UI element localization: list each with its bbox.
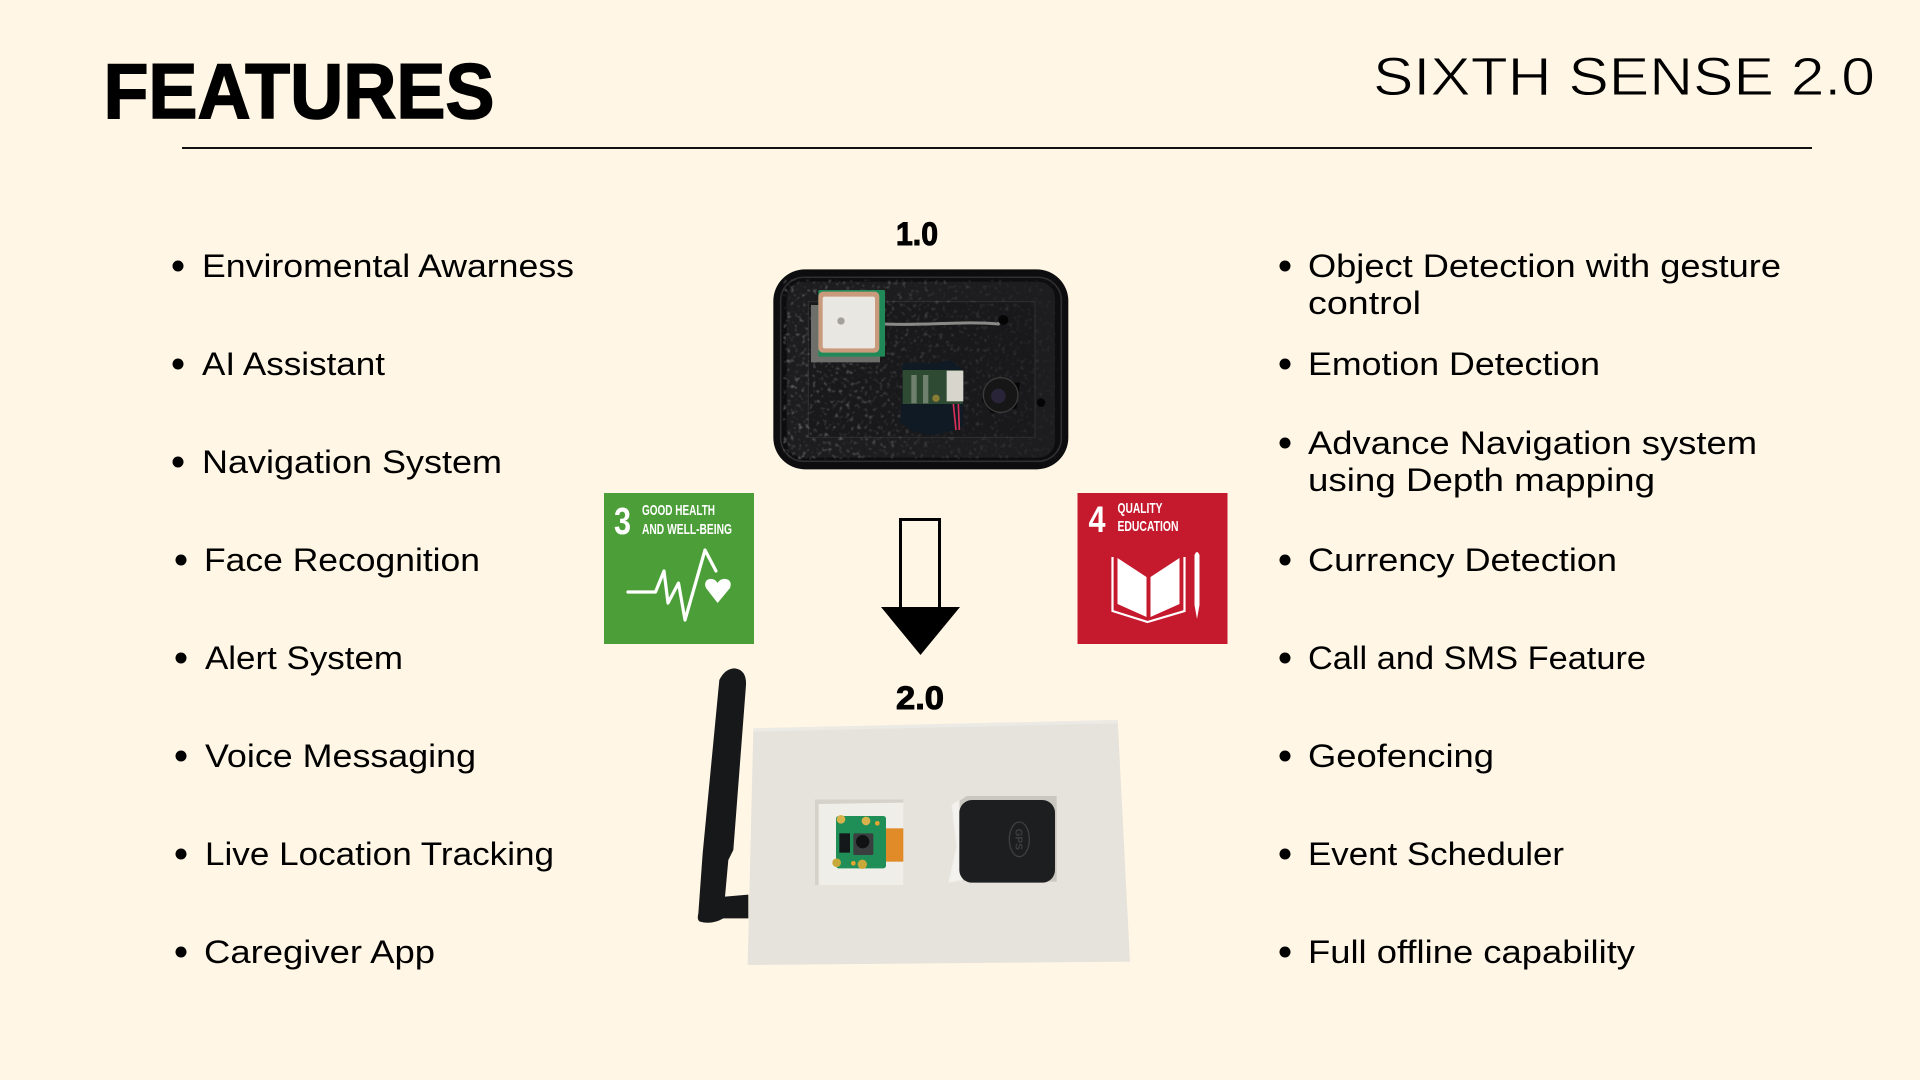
feature: Advance Navigation system using Depth mapping: using Depth mapping xyxy=(1308,462,1655,498)
icon: SDG 3 good health and well-being: GOOD HEALTH xyxy=(642,502,715,519)
feature: Advance Navigation system using Depth mapping: Advance Navigation system xyxy=(1308,425,1757,461)
feature: Advance Navigation system using Depth mapping xyxy=(1280,425,1757,498)
arrow: version 1.0 to 2.0 xyxy=(881,520,960,655)
feature: Navigation System: Navigation System xyxy=(202,444,502,480)
feature: Call and SMS Feature: Call and SMS Feature xyxy=(1308,640,1646,676)
icon: SDG 3 good health and well-being: 3 xyxy=(614,501,631,543)
antenna xyxy=(698,668,748,923)
gps antenna xyxy=(811,290,885,362)
feature: Event Scheduler: Event Scheduler xyxy=(1308,836,1564,872)
feature: Voice Messaging: Voice Messaging xyxy=(205,738,476,774)
feature: Currency Detection: Currency Detection xyxy=(1308,542,1617,578)
subtitle: SIXTH SENSE 2.0 xyxy=(1373,47,1875,107)
feature: Object Detection with gesture control: Object Detection with gesture xyxy=(1308,248,1781,284)
title: FEATURES xyxy=(104,47,494,135)
panel: version 1 features xyxy=(172,248,574,970)
panel: version 2 features xyxy=(1280,248,1781,970)
feature: Object Detection with gesture control: control xyxy=(1308,285,1421,321)
feature: Alert System: Alert System xyxy=(205,640,403,676)
icon: SDG 4 quality education xyxy=(1078,493,1228,644)
gps module xyxy=(948,796,1057,883)
feature: Object Detection with gesture control xyxy=(1280,248,1781,321)
device photo: version 2.0 xyxy=(698,668,1130,965)
camera module xyxy=(815,799,903,885)
feature: AI Assistant: AI Assistant xyxy=(202,346,385,382)
icon: SDG 3 good health and well-being: AND WELL-BEING xyxy=(642,521,732,538)
feature: Enviromental Awarness: Enviromental Awarness xyxy=(202,248,574,284)
feature: Geofencing: Geofencing xyxy=(1308,738,1494,774)
icon: SDG 4 quality education: QUALITY xyxy=(1118,500,1162,517)
feature: Live Location Tracking: Live Location Tracking xyxy=(205,836,554,872)
icon: SDG 3 good health and well-being xyxy=(604,493,754,644)
feature: Emotion Detection: Emotion Detection xyxy=(1308,346,1600,382)
opening with circuit board xyxy=(900,360,963,436)
label: version 2.0: 2.0 xyxy=(896,680,944,716)
label: version 1.0: 1.0 xyxy=(896,216,938,252)
camera lens xyxy=(982,378,1020,413)
case xyxy=(748,720,1130,965)
gps module: GPS xyxy=(1012,829,1023,850)
feature: Full offline capability: Full offline capability xyxy=(1308,934,1635,970)
icon: SDG 4 quality education: EDUCATION xyxy=(1118,518,1178,535)
feature: Caregiver App: Caregiver App xyxy=(204,934,435,970)
device photo: version 1.0 xyxy=(773,269,1068,469)
feature: Face Recognition: Face Recognition xyxy=(204,542,480,578)
icon: SDG 4 quality education: 4 xyxy=(1088,499,1106,540)
